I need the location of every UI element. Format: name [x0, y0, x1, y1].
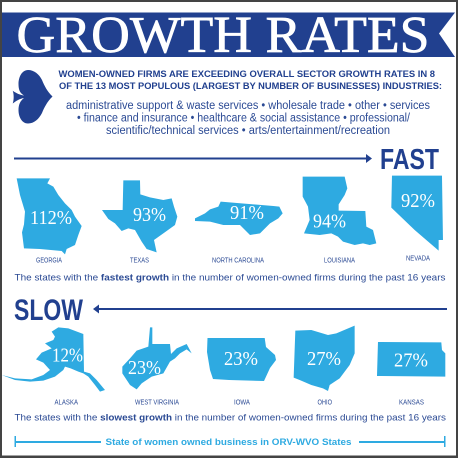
title banner: GROWTH RATES [16, 7, 430, 64]
icon: spade [13, 70, 52, 124]
state: Georgia: GEORGIA [36, 256, 62, 265]
arrow: slow [93, 304, 447, 314]
state: Louisiana: LOUISIANA [324, 256, 355, 265]
intro text: WOMEN-OWNED FIRMS ARE EXCEEDING OVERALL SECTOR GROWTH RATES IN 8 [58, 69, 435, 79]
state: North Carolina [195, 202, 283, 265]
state: Kansas: KANSAS [399, 397, 424, 406]
state: Ohio [294, 326, 355, 406]
state: Iowa: IOWA [234, 397, 250, 406]
state: Louisiana: 94% [313, 211, 346, 233]
intro text: OF THE 13 MOST POPULOUS (LARGEST BY NUMBER OF BUSINESSES) INDUSTRIES: [59, 81, 442, 91]
industries list: scientific/technical services • arts/entertainment/recreation [106, 125, 390, 137]
state: Texas [102, 180, 177, 265]
arrow: fast [14, 154, 372, 163]
state: Kansas [377, 342, 445, 406]
state: West Virginia: WEST VIRGINIA [135, 397, 179, 406]
state: North Carolina: 91% [230, 202, 264, 224]
state: Texas: TEXAS [130, 256, 149, 265]
state: Alaska: 12% [52, 345, 83, 367]
industries list [66, 100, 430, 137]
state: Georgia [17, 178, 82, 265]
heading: slow: SLOW [14, 294, 84, 327]
state: North Carolina: NORTH CAROLINA [212, 256, 264, 265]
fastest growth caption: The states with the fastest growth in the number of women-owned firms during the past 16 years [14, 273, 446, 284]
state: Iowa: 23% [224, 348, 258, 370]
state: Nevada [391, 176, 443, 262]
state: West Virginia [122, 327, 192, 406]
state: Ohio: OHIO [318, 397, 332, 406]
state: West Virginia: 23% [128, 357, 161, 379]
industries list: • finance and insurance • healthcare & social assistance • professional/ [77, 112, 411, 124]
heading: fast: FAST [380, 144, 439, 176]
state: Iowa [207, 338, 276, 406]
state: Kansas: 27% [394, 350, 428, 372]
right footer rule [359, 436, 446, 447]
state: Texas: 93% [133, 204, 166, 226]
industries list: administrative support & waste services • wholesale trade • other • services [66, 100, 430, 112]
state: Georgia: 112% [30, 207, 72, 229]
state: Nevada: 92% [401, 190, 435, 212]
state: Alaska: ALASKA [54, 397, 78, 406]
state: Ohio: 27% [307, 348, 341, 370]
footer text: State of women owned business in ORV-WVO States [106, 437, 352, 448]
state: Nevada: NEVADA [406, 254, 430, 262]
state: Louisiana [303, 177, 376, 265]
intro text [58, 69, 442, 91]
slowest growth caption: The states with the slowest growth in the number of women-owned firms during the past 16 years [14, 413, 446, 424]
state: Alaska [2, 327, 105, 406]
left footer rule [14, 436, 101, 447]
